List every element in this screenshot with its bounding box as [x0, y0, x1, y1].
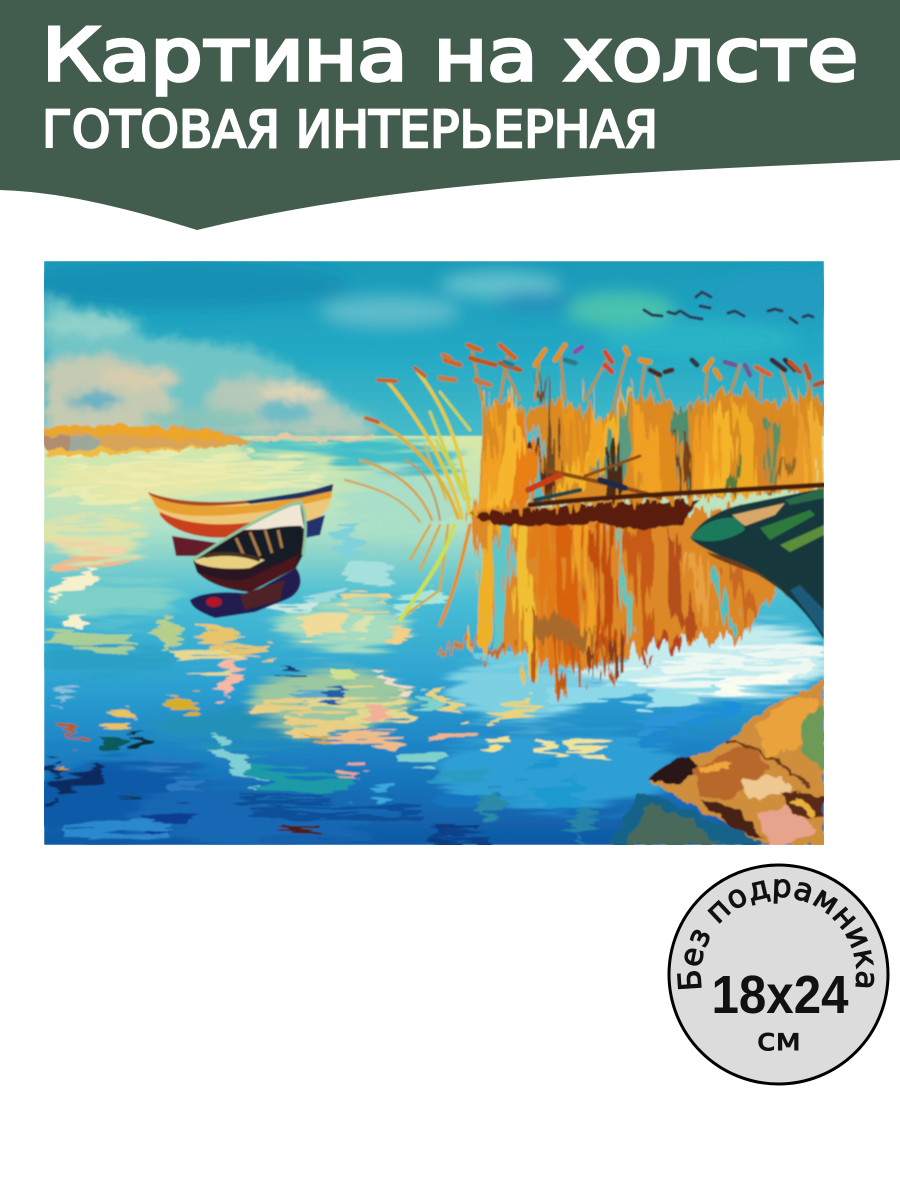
branches and waterline	[528, 456, 824, 505]
subtitle: ГОТОВАЯ ИНТЕРЬЕРНАЯ	[42, 101, 658, 160]
reed mass	[472, 392, 824, 515]
birds	[644, 292, 813, 323]
clouds	[40, 295, 380, 436]
reed stalks and heads	[440, 345, 824, 420]
water strokes	[20, 440, 830, 845]
left shore	[44, 425, 370, 456]
water base	[44, 436, 824, 845]
badge: size and no-stretcher note	[668, 864, 890, 1086]
sky	[10, 261, 850, 441]
title: Картина на холсте	[42, 13, 858, 97]
reed blades	[474, 385, 500, 512]
dense reeds	[472, 372, 824, 515]
boat shadow	[190, 568, 300, 618]
unit: см	[757, 1023, 801, 1058]
header banner	[0, 0, 900, 230]
near boat	[190, 502, 305, 618]
waterline shadow	[470, 500, 700, 530]
painting: lake with boats and reeds	[10, 261, 850, 845]
rock	[610, 683, 824, 845]
reflection of reeds	[442, 510, 790, 690]
far boat	[148, 484, 333, 556]
thin reeds left	[345, 368, 470, 625]
size: 18x24	[712, 965, 848, 1025]
right bank	[690, 488, 824, 640]
curved label: Без подрамника	[677, 879, 874, 990]
